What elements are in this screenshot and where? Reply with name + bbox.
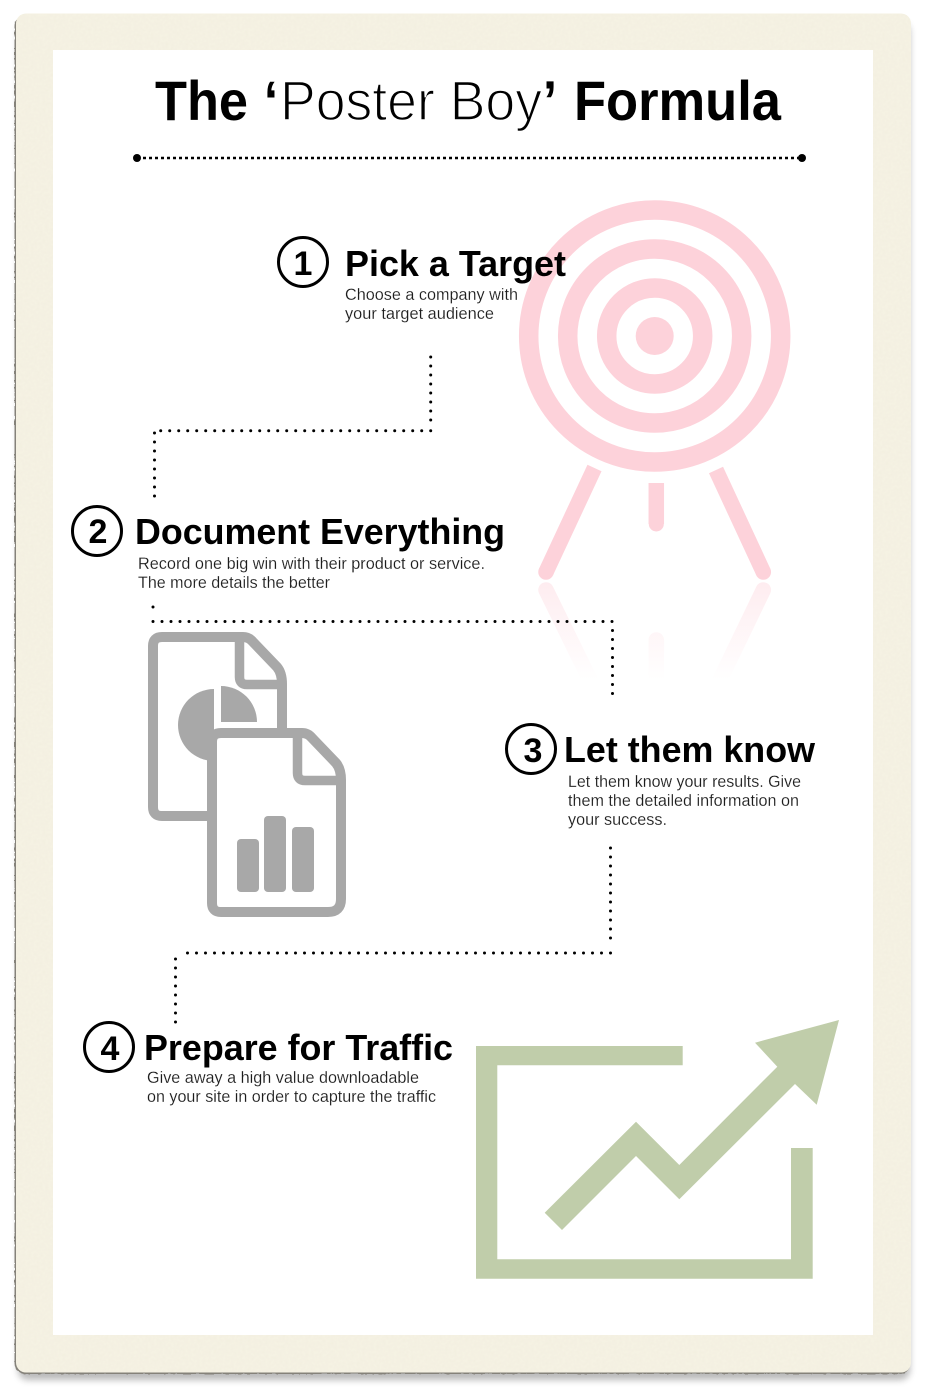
number badge 2 bbox=[72, 506, 122, 556]
number badge 1: 1 bbox=[294, 245, 312, 283]
connector: step 2 to step 3 bbox=[153, 607, 613, 695]
title: The bbox=[155, 69, 248, 132]
description 4 bbox=[147, 1069, 436, 1106]
icon: growth chart bbox=[476, 1020, 839, 1279]
heading 2: Document Everything bbox=[135, 511, 505, 552]
title divider bbox=[133, 154, 806, 162]
description 2 bbox=[138, 555, 485, 592]
number badge 2: 2 bbox=[89, 513, 107, 551]
heading 4: Prepare for Traffic bbox=[144, 1027, 453, 1068]
number badge 1 bbox=[278, 238, 328, 286]
title: ’ bbox=[543, 69, 557, 132]
icon: documents bbox=[153, 637, 341, 912]
description 1 bbox=[345, 286, 518, 323]
step 4: prepare for traffic bbox=[84, 1022, 453, 1106]
heading 1: Pick a Target bbox=[345, 243, 566, 284]
number badge 4: 4 bbox=[101, 1030, 120, 1068]
icon: target bbox=[529, 210, 781, 684]
description 3: your success. bbox=[568, 811, 667, 829]
title: Poster Boy bbox=[280, 69, 542, 132]
heading 3: Let them know bbox=[564, 729, 816, 770]
description 4: on your site in order to capture the traffic bbox=[147, 1088, 436, 1106]
description 2: The more details the better bbox=[138, 574, 330, 592]
description 1: your target audience bbox=[345, 305, 494, 323]
connector: step 1 to step 2 bbox=[154, 357, 431, 497]
number badge 3: 3 bbox=[524, 732, 542, 770]
description 3: them the detailed information on bbox=[568, 792, 799, 810]
description 2: Record one big win with their product or service. bbox=[138, 555, 485, 573]
step 1: pick a target bbox=[278, 238, 566, 323]
description 1: Choose a company with bbox=[345, 286, 518, 304]
description 3 bbox=[568, 773, 801, 829]
step 2: document everything bbox=[72, 506, 505, 592]
title: ‘ bbox=[264, 69, 278, 132]
title bbox=[155, 69, 782, 132]
number badge 3 bbox=[506, 724, 556, 774]
description 4: Give away a high value downloadable bbox=[147, 1069, 419, 1087]
description 3: Let them know your results. Give bbox=[568, 773, 801, 791]
step 3: let them know bbox=[506, 724, 816, 829]
connector: step 3 to step 4 bbox=[176, 848, 610, 1023]
title: Formula bbox=[574, 69, 782, 132]
number badge 4 bbox=[84, 1022, 134, 1072]
